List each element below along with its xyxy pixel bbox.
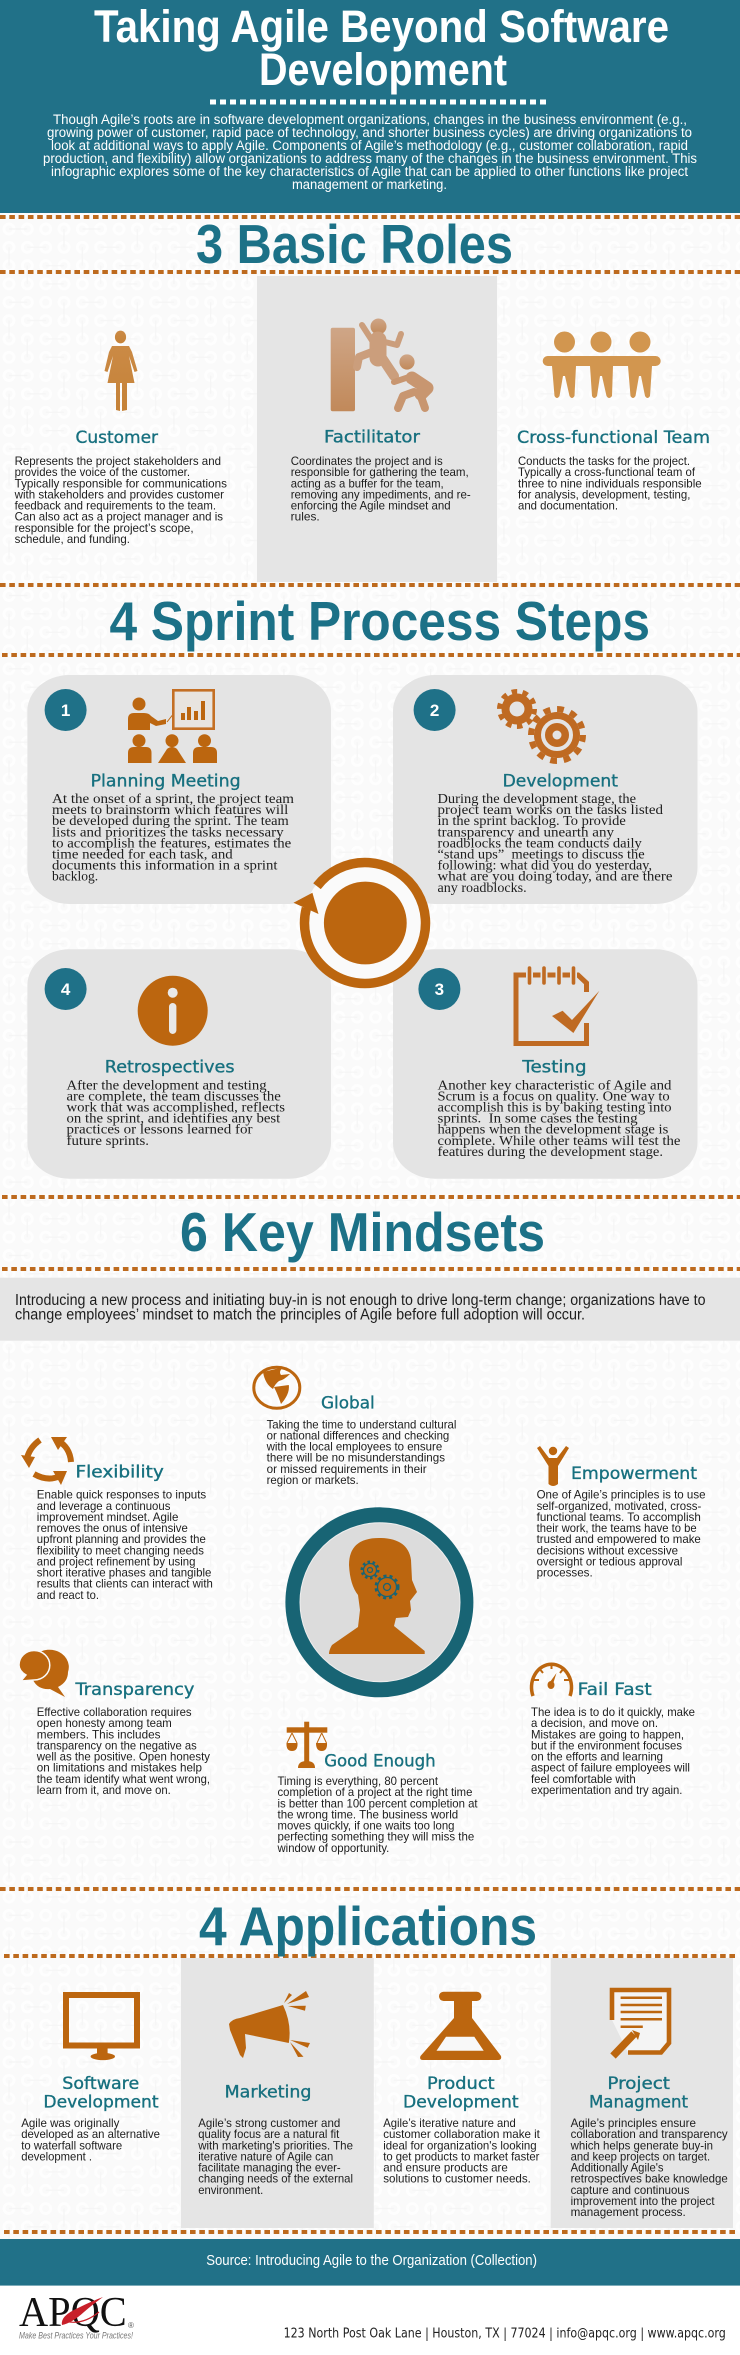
text: customer: feedback and requirements to the team. — [15, 500, 216, 513]
heading: Development: Development — [503, 772, 618, 792]
text: team: Typically a cross-functional team of — [518, 466, 696, 479]
intro text: management or marketing. — [292, 177, 447, 192]
text: retrospectives — [66, 1077, 285, 1148]
panel: customer — [14, 331, 227, 546]
text: empowerment: trusted and empowered to make — [537, 1533, 701, 1546]
text: product development: customer collaboration make it — [383, 2128, 541, 2141]
text: marketing — [197, 2117, 353, 2197]
text: project management: Additionally Agile's — [571, 2162, 664, 2174]
text: fail fast — [531, 1706, 695, 1797]
panel: marketing — [181, 1958, 374, 2228]
icon: scales — [286, 1722, 327, 1768]
text: transparency: the team identify what went wrong, — [37, 1773, 210, 1786]
text: software development: Agile was originally — [21, 2117, 120, 2130]
title: Development — [259, 44, 507, 95]
intro text — [43, 112, 697, 192]
text: software development: developed as an alternative — [21, 2128, 160, 2141]
heading: Software Development: Development — [43, 2092, 159, 2112]
text: retrospectives: work that was accomplished, reflects — [66, 1100, 285, 1114]
mindset: transparency — [19, 1650, 210, 1797]
text: empowerment: One of Agile’s principles is to use — [537, 1489, 706, 1502]
text: planning meeting — [52, 791, 295, 884]
text: product development: Agile’s iterative nature and — [383, 2117, 516, 2130]
icon: globe — [254, 1367, 300, 1408]
text: global: there will be no misunderstandings — [267, 1452, 445, 1465]
text: facilitator: enforcing the Agile mindset and — [291, 500, 451, 513]
text: flexibility: and leverage a continuous — [37, 1500, 171, 1513]
text: marketing: iterative nature of Agile can — [198, 2150, 333, 2163]
text: testing: Scrum is a focus on quality. One way to — [438, 1088, 670, 1103]
icon: flask — [420, 1992, 501, 2060]
heading: Marketing: Marketing — [225, 2082, 312, 2102]
text: empowerment: self-organized, motivated, cross- — [537, 1500, 701, 1513]
heading: 4 Applications: 4 Applications — [199, 1895, 537, 1957]
heading: 4 Sprint Process Steps: 4 Sprint Process Steps — [110, 590, 650, 652]
text: good enough: perfecting something they will miss the — [278, 1831, 474, 1844]
mindset: flexibility — [21, 1437, 213, 1602]
text: marketing: environment. — [198, 2184, 263, 2197]
text: customer: Can also act as a project manager and is — [15, 511, 223, 524]
text: development: transparency and unearth any — [438, 824, 614, 839]
text: transparency: members. This includes — [37, 1728, 161, 1741]
icon: monitor — [66, 1995, 137, 2060]
text: project management: Agile’s principles ensure — [571, 2117, 696, 2130]
text: development — [438, 791, 673, 895]
badge 1: 1 — [61, 701, 70, 720]
icon: checklist notepad — [516, 968, 599, 1044]
text: global: region or markets. — [267, 1474, 359, 1487]
header band — [0, 0, 740, 213]
text: facilitator: responsible for gathering the team, — [291, 466, 469, 479]
heading: Flexibility: Flexibility — [76, 1463, 164, 1483]
heading: Software Development: Software — [62, 2074, 139, 2094]
text: flexibility: Enable quick responses to inputs — [37, 1489, 206, 1502]
text: retrospectives: After the development and testing — [66, 1077, 267, 1092]
heading: Fail Fast: Fail Fast — [578, 1680, 652, 1700]
text: good enough: window of opportunity. — [277, 1842, 389, 1855]
intro text: Though Agile’s roots are in software development organizations, changes in the business environment (e.g., — [53, 112, 687, 127]
icon: speech bubbles — [19, 1650, 69, 1697]
text: global — [266, 1418, 456, 1487]
text: planning meeting: lists and prioritizes the tasks necessary — [52, 824, 284, 839]
text: facilitator: Coordinates the project and is — [291, 455, 443, 468]
heading: Cross-functional Team: Cross-functional Team — [517, 428, 710, 448]
heading: Empowerment: Empowerment — [571, 1464, 697, 1484]
title: Taking Agile Beyond Software — [94, 1, 669, 52]
panel: development — [393, 675, 698, 904]
text: good enough: moves quickly, if one waits too long — [278, 1820, 454, 1832]
text: software development — [21, 2117, 160, 2163]
text: transparency: on limitations and mistakes help — [37, 1762, 202, 1775]
text: customer: schedule, and funding. — [15, 533, 130, 546]
text: flexibility: removes the onus of intensive — [37, 1522, 188, 1535]
icon: information — [138, 976, 208, 1046]
text: customer — [14, 455, 227, 546]
text: software development: development . — [21, 2150, 92, 2163]
logo: APQC: APQC — [19, 2290, 127, 2336]
panel: testing — [393, 949, 698, 1179]
text: fail fast: The idea is to do it quickly, make — [531, 1706, 695, 1719]
text: development: project team works on the tasks listed — [438, 802, 663, 817]
text: fail fast: experimentation and try again. — [531, 1784, 682, 1797]
logo: APQC: Make Best Practices Your Practices! — [19, 2331, 133, 2341]
text: fail fast: aspect of failure employees will — [531, 1762, 690, 1775]
text: retrospectives: on the sprint, and identifies any best — [66, 1111, 281, 1126]
badge 2 — [414, 689, 456, 731]
icon: circular arrows — [21, 1437, 71, 1485]
text: development: in the sprint backlog. To provide — [438, 813, 626, 828]
text: development: roadblocks the team conducts daily — [438, 835, 642, 850]
logo: APQC: ® — [128, 2321, 134, 2330]
text: team — [518, 455, 702, 513]
text: development: “stand ups” meetings to discuss the — [438, 846, 645, 862]
text: retrospectives: practices or lessons learned for — [66, 1122, 253, 1137]
text: flexibility: and project refinement by using — [37, 1556, 195, 1568]
icon: woman — [104, 331, 138, 411]
text: development: following: what did you do yesterday, — [438, 858, 652, 873]
text: flexibility — [37, 1489, 213, 1602]
text: product development — [383, 2117, 541, 2186]
text: marketing: with marketing's priorities. The — [197, 2139, 353, 2152]
text: fail fast: on the efforts and learning — [531, 1750, 663, 1764]
text: good enough: the wrong time. The business world — [278, 1808, 458, 1821]
text: testing: accomplish this is by baking testing into — [438, 1100, 672, 1114]
badge 1 — [45, 689, 87, 731]
text: customer: provides the voice of the customer. — [15, 466, 190, 479]
heading: Testing: Testing — [521, 1058, 587, 1078]
text: flexibility: and react to. — [37, 1589, 99, 1602]
text: testing: happens when the development stage is — [438, 1122, 668, 1137]
heading: Factilitator: Factilitator — [324, 428, 420, 448]
text: team: and documentation. — [518, 500, 618, 513]
text: global: or missed requirements in their — [267, 1463, 427, 1476]
text: software development: to waterfall software — [21, 2139, 122, 2152]
intro text: growing power of customer, rapid pace of technology, and shorter business cycles) are driving organizations to — [47, 125, 692, 140]
text: testing: sprints. In some cases the testing — [438, 1111, 638, 1126]
text: planning meeting: be developed during the sprint. The team — [52, 813, 289, 828]
heading: Retrospectives: Retrospectives — [105, 1058, 235, 1078]
heading: Software Development — [43, 2074, 159, 2112]
text: good enough — [277, 1775, 478, 1855]
text: product development: to get products to market faster — [383, 2150, 540, 2163]
heading: Project Managment: Project — [607, 2074, 670, 2094]
intro band: mindsets: change employees’ mindset to match the principles of Agile before full adoption will occur. — [15, 1307, 585, 1324]
text: flexibility: short iterative phases and tangible — [37, 1567, 211, 1580]
heading: Product Development — [403, 2074, 519, 2112]
text: retrospectives: are complete, the team discusses the — [66, 1088, 281, 1103]
icon: document and pencil — [612, 1990, 669, 2056]
text: transparency: Effective collaboration requires — [37, 1706, 192, 1719]
text: transparency: well as the positive. Open honesty — [36, 1750, 210, 1764]
text: project management: which helps generate buy-in — [570, 2139, 713, 2152]
panel: cross-functional team — [517, 332, 710, 513]
text: project management: management process. — [571, 2206, 686, 2219]
badge 4 — [45, 968, 87, 1010]
badge 3 — [418, 968, 460, 1010]
text: empowerment: decisions without excessive — [537, 1544, 678, 1557]
text: empowerment: oversight or tedious approval — [537, 1556, 682, 1568]
text: facilitator: removing any impediments, and re- — [291, 488, 471, 501]
mindset: good enough — [277, 1722, 478, 1855]
text: testing — [438, 1077, 680, 1159]
text: marketing: changing needs of the external — [198, 2173, 353, 2186]
text: product development: ideal for organization's looking — [383, 2139, 537, 2152]
text: global: or national differences and checking — [267, 1429, 449, 1442]
text: customer: responsible for the project’s scope, — [15, 522, 194, 535]
icon: three people holding bar — [543, 332, 661, 398]
text: product development: solutions to customer needs. — [383, 2173, 531, 2186]
text: transparency — [36, 1706, 210, 1797]
text: fail fast: a decision, and move on. — [531, 1717, 658, 1730]
badge 2: 2 — [430, 701, 439, 720]
text: project management — [570, 2117, 728, 2219]
text: team: three to nine individuals responsible — [518, 477, 702, 490]
text: customer: Represents the project stakeholders and — [15, 455, 221, 468]
text: project management: capture and continuous — [571, 2184, 690, 2197]
text: fail fast: but if the environment focuses — [531, 1739, 682, 1752]
icon: presenter with chart and audience — [128, 690, 217, 763]
heading: Customer: Customer — [76, 428, 158, 448]
heading: Global: Global — [321, 1393, 375, 1413]
text: development: any roadblocks. — [438, 880, 527, 895]
text: marketing: facilitate managing the ever- — [198, 2162, 341, 2174]
text: transparency: open honesty among team — [37, 1717, 172, 1730]
text: planning meeting: documents this information in a sprint — [52, 858, 278, 873]
text: planning meeting: meets to brainstorm which features will — [52, 802, 289, 817]
text: flexibility: improvement mindset. Agile — [37, 1511, 178, 1524]
text: fail fast: Mistakes are going to happen, — [531, 1728, 684, 1741]
badge 3: 3 — [435, 980, 444, 999]
mindset: global — [254, 1367, 456, 1487]
text: customer: Typically responsible for communications — [15, 477, 227, 490]
heading: Project Managment — [589, 2074, 688, 2112]
icon: team members climbing wall — [331, 318, 427, 411]
text: flexibility: results that clients can interact with — [37, 1578, 213, 1591]
text: planning meeting: to accomplish the features, estimates the — [52, 835, 291, 850]
heading: Product Development: Development — [403, 2092, 519, 2112]
text: development: what are you doing today, and are there — [438, 869, 673, 884]
source band: Source: Introducing Agile to the Organization (Collection) — [206, 2252, 537, 2269]
text: team: Conducts the tasks for the project. — [518, 455, 690, 468]
intro text: infographic explores some of the key characteristics of Agile that can be applied to other functions like project — [51, 164, 688, 179]
text: empowerment: their work, the teams have to be — [537, 1522, 697, 1535]
panel: planning meeting — [27, 675, 331, 904]
text: development: During the development stage, the — [438, 791, 636, 806]
text: flexibility: flexibility to meet changing needs — [37, 1544, 204, 1557]
text: retrospectives: future sprints. — [66, 1133, 149, 1148]
icon: head with gears in oval — [285, 1507, 473, 1697]
text: product development: and ensure products are — [383, 2162, 508, 2174]
text: facilitator: rules. — [291, 511, 320, 524]
text: global: Taking the time to understand cultural — [267, 1418, 456, 1431]
text: empowerment — [537, 1489, 706, 1580]
text: testing: Another key characteristic of Agile and — [438, 1077, 672, 1092]
text: project management: collaboration and transparency — [571, 2128, 728, 2141]
mindset: fail fast — [531, 1663, 695, 1797]
panel: software development — [21, 1995, 160, 2163]
text: empowerment: functional teams. To accomplish — [537, 1511, 701, 1524]
heading: Project Managment: Managment — [589, 2092, 688, 2112]
text: planning meeting: time needed for each task, and — [52, 846, 233, 862]
text: transparency: learn from it, and move on. — [37, 1784, 171, 1797]
panel: project management — [551, 1958, 733, 2228]
text: project management: and keep projects on target. — [571, 2150, 710, 2163]
footer — [0, 2286, 740, 2355]
icon: sprint cycle — [294, 861, 427, 985]
intro text: production, and flexibility) allow organizations to address many of the changes in the business environment. This — [43, 151, 697, 166]
text: good enough: completion of a project at the right time — [278, 1786, 472, 1799]
heading: 3 Basic Roles: 3 Basic Roles — [196, 213, 513, 275]
panel: product development — [383, 1992, 541, 2186]
heading: Planning Meeting: Planning Meeting — [91, 772, 241, 792]
text: facilitator — [291, 455, 471, 524]
intro text: look at additional ways to apply Agile. Components of Agile’s methodology (e.g., customer collaboration, rapid — [51, 138, 688, 153]
text: fail fast: feel comfortable with — [531, 1773, 636, 1786]
text: facilitator: acting as a buffer for the team, — [291, 477, 444, 490]
heading: Good Enough: Good Enough — [324, 1752, 436, 1772]
text: marketing: Agile’s strong customer and — [198, 2117, 340, 2130]
panel: retrospectives — [27, 949, 331, 1179]
heading: 6 Key Mindsets: 6 Key Mindsets — [180, 1201, 545, 1263]
icon: person with raised arms — [537, 1446, 569, 1486]
icon: speedometer — [532, 1663, 572, 1696]
text: good enough: is better than 100 percent completion at — [278, 1797, 478, 1810]
title — [94, 1, 669, 95]
text: global: with the local employees to ensure — [266, 1440, 442, 1454]
text: flexibility: upfront planning and provides the — [37, 1533, 206, 1546]
text: planning meeting: backlog. — [52, 869, 98, 884]
icon: gears — [500, 692, 583, 761]
mindset: empowerment — [537, 1446, 706, 1580]
text: planning meeting: At the onset of a sprint, the project team — [52, 791, 295, 806]
panel: facilitator — [257, 276, 497, 582]
heading: Product Development: Product — [427, 2074, 495, 2094]
heading: Transparency: Transparency — [74, 1680, 194, 1700]
intro band: mindsets — [0, 1278, 740, 1341]
text: team: for analysis, development, testing, — [518, 488, 690, 501]
text: empowerment: processes. — [537, 1567, 593, 1580]
text: good enough: Timing is everything, 80 percent — [278, 1775, 439, 1788]
text: customer: with stakeholders and provides customer — [14, 488, 224, 501]
text: project management: improvement into the project — [571, 2195, 715, 2208]
text: transparency: transparency on the negative as — [37, 1739, 197, 1752]
text: marketing: quality focus are a natural fit — [198, 2128, 340, 2141]
text: testing: features during the development stage. — [438, 1144, 663, 1159]
text: testing: complete. While other teams will test the — [438, 1133, 680, 1148]
icon: megaphone — [229, 1991, 310, 2058]
text: project management: retrospectives bake knowledge — [571, 2173, 728, 2186]
badge 4: 4 — [61, 980, 71, 999]
source band — [0, 2239, 740, 2286]
